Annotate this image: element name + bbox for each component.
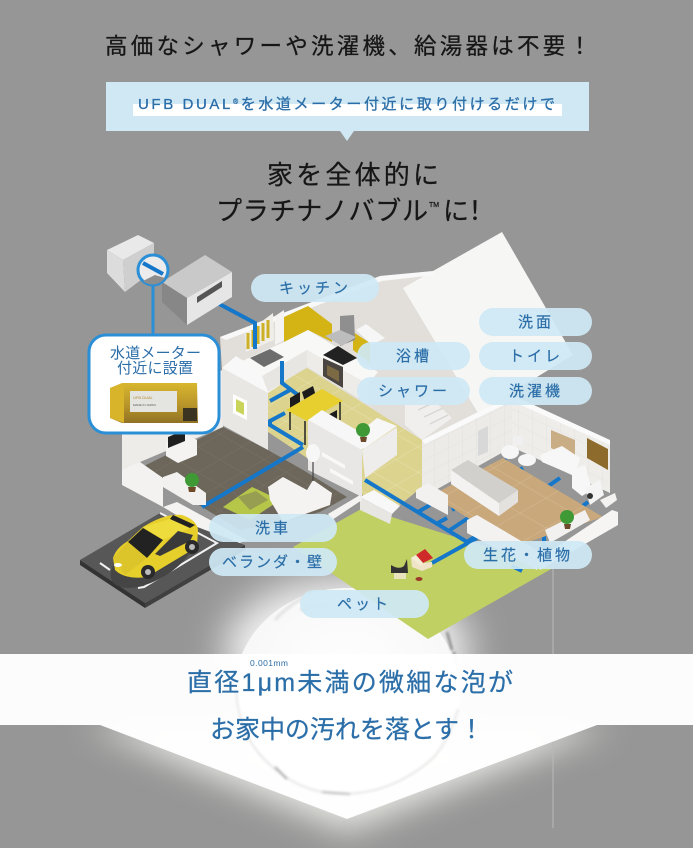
label: bathtub bbox=[357, 342, 470, 370]
top edge of back wall bbox=[220, 271, 435, 340]
label: washstand bbox=[479, 308, 592, 336]
vertical guide line bbox=[552, 565, 554, 828]
lawn bbox=[293, 508, 553, 639]
glow behind water bubble bbox=[85, 578, 612, 832]
label: bathtub: 浴槽 bbox=[396, 348, 432, 365]
callout box: UFB DUAL bbox=[106, 82, 589, 141]
partition wall with picture bbox=[222, 356, 280, 450]
label: pets bbox=[300, 590, 429, 618]
living room furniture bbox=[163, 430, 332, 522]
label: washstand: 洗面 bbox=[518, 314, 554, 331]
heading: whole house: に！ bbox=[443, 196, 488, 226]
left living wall bbox=[122, 370, 223, 475]
label: washing machine: 洗濯機 bbox=[509, 383, 563, 400]
label: veranda and walls bbox=[209, 548, 337, 576]
label: kitchen: キッチン bbox=[279, 280, 351, 297]
label: car wash bbox=[209, 514, 337, 542]
label: shower: シャワー bbox=[378, 383, 450, 400]
meter pipe magnifier bbox=[138, 255, 168, 336]
white banner with arrow bbox=[0, 654, 693, 819]
callout: installation near water meter: 付近に設置 bbox=[117, 360, 193, 377]
heading: whole house bbox=[216, 160, 488, 226]
water meter boxes bbox=[107, 235, 232, 325]
label: shower bbox=[357, 377, 470, 405]
dog house and dog bbox=[391, 549, 433, 581]
label: toilet: トイレ bbox=[509, 348, 563, 365]
bottom message line 2: お家中の汚れを落とす！ bbox=[210, 716, 484, 744]
pipes bbox=[202, 299, 588, 571]
heading: top line: 高価なシャワーや洗濯機、給湯器は不要！ bbox=[105, 34, 591, 59]
heading: whole house: TM bbox=[429, 202, 439, 209]
label: veranda and walls: ベランダ・壁 bbox=[222, 554, 324, 571]
stairs bbox=[405, 392, 452, 440]
label: pets: ペット bbox=[337, 596, 391, 613]
bottom message line 1: 直径1μm未満の微細な泡が bbox=[187, 669, 513, 697]
heading: whole house: 家を全体的に bbox=[267, 160, 439, 190]
callout box: UFB DUAL: を水道メーター付近に取り付けるだけで bbox=[241, 96, 555, 113]
label: toilet bbox=[479, 342, 592, 370]
callout box: UFB DUAL: UFB DUAL bbox=[138, 96, 230, 113]
isometric house bbox=[122, 232, 618, 639]
center wall bbox=[308, 410, 397, 497]
bathroom low walls bbox=[416, 483, 618, 570]
label: washing machine bbox=[479, 377, 592, 405]
water bubble upper part bbox=[234, 588, 460, 796]
dining table and chairs bbox=[286, 386, 343, 445]
low walls bbox=[163, 490, 400, 547]
water bubble faint lower edge bbox=[236, 690, 458, 794]
back wall bbox=[220, 273, 512, 490]
bathroom bbox=[422, 395, 610, 548]
heading: whole house: プラチナノバブル bbox=[216, 196, 428, 226]
gold device: MADE IN JAPAN bbox=[133, 403, 156, 407]
unit annotation: 0.001mm bbox=[250, 658, 288, 668]
gold device: UFB DUAL bbox=[133, 395, 154, 400]
callout: installation near water meter bbox=[89, 335, 219, 433]
callout: installation near water meter: 水道メーター bbox=[110, 345, 201, 362]
parking lot and car bbox=[80, 513, 245, 608]
label: car wash: 洗車 bbox=[255, 520, 291, 537]
gold device bbox=[110, 383, 198, 423]
callout box: UFB DUAL: ® bbox=[233, 98, 239, 106]
kitchen cabinets and counter bbox=[240, 306, 385, 404]
roof panel bbox=[403, 232, 573, 413]
plants bbox=[185, 423, 574, 529]
label: flowers and plants: 生花・植物 bbox=[483, 547, 573, 564]
label: kitchen bbox=[251, 274, 379, 302]
label: flowers and plants bbox=[464, 541, 592, 569]
dark living floor bbox=[140, 427, 347, 530]
yellow kitchen floor bbox=[268, 368, 422, 513]
